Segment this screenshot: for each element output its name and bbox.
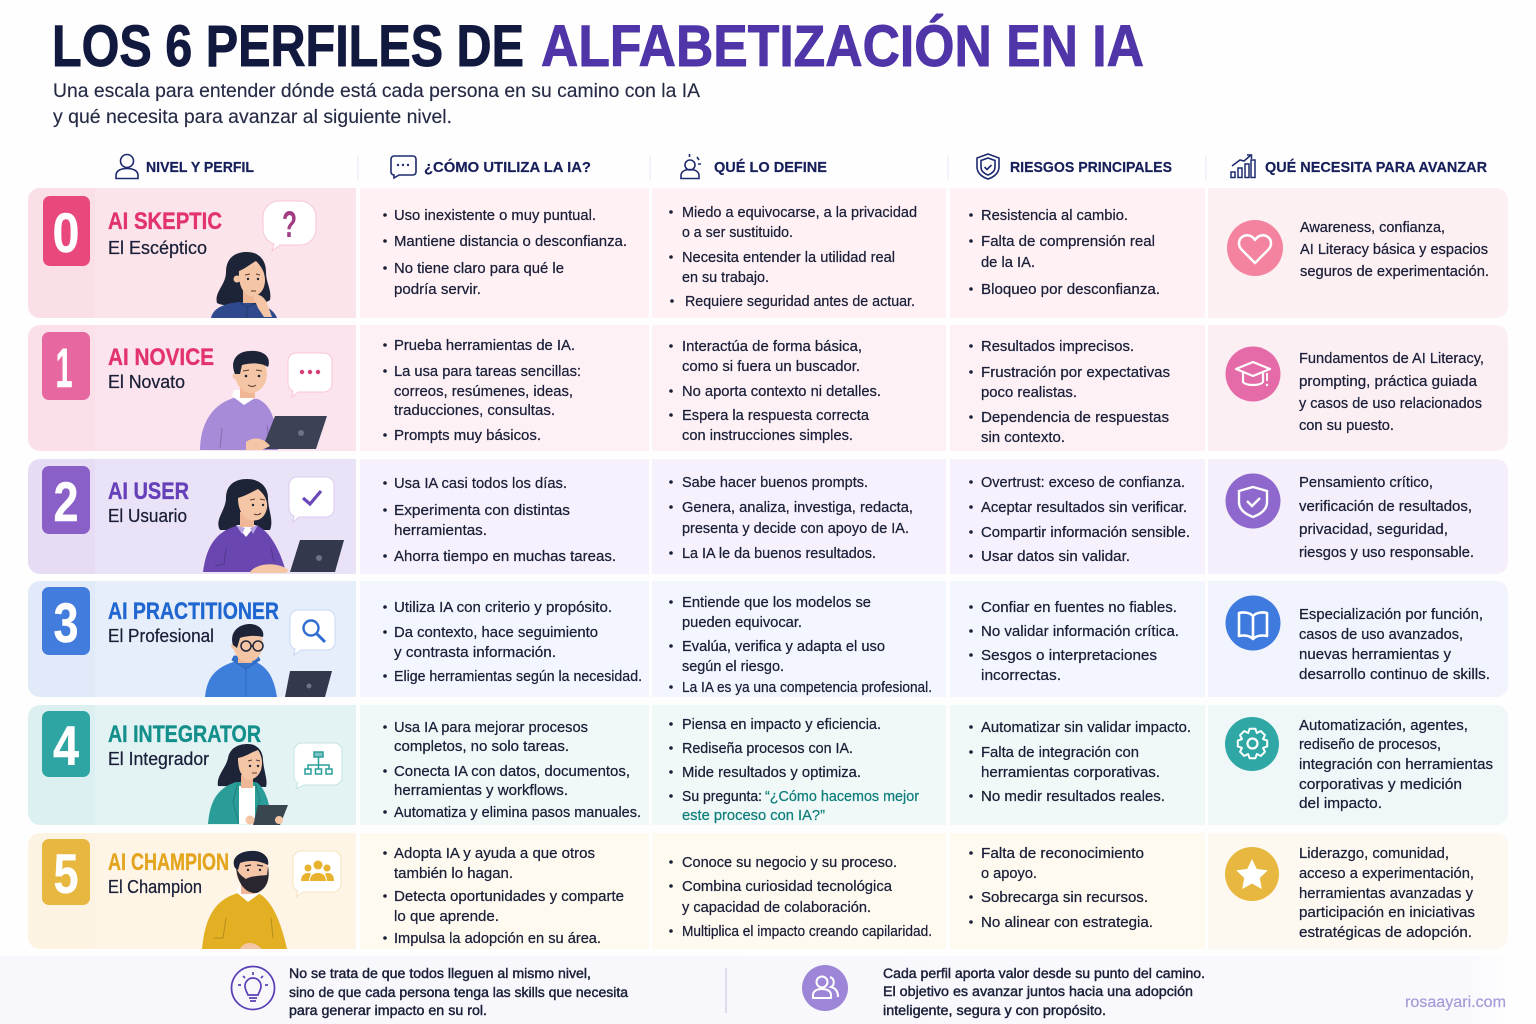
panel: que necesita 2: Pensamiento crítico, [1299, 475, 1433, 491]
panel: que lo define 1: con instrucciones simples. [682, 428, 853, 444]
panel: como utiliza 4: Conecta IA con datos, documentos, [394, 764, 630, 780]
panel: que necesita 0 [1208, 188, 1508, 318]
panel: que necesita 1 [1208, 325, 1508, 451]
callout: message right: inteligente, segura y con propósito. [883, 1003, 1106, 1018]
panel: que necesita 3: nuevas herramientas y [1299, 647, 1452, 663]
panel: perfil 3: AI PRACTITIONER [108, 598, 279, 625]
panel: riesgos 2: Compartir información sensible. [981, 525, 1190, 541]
header: que lo define [681, 154, 827, 178]
panel: que necesita 0: Awareness, confianza, [1300, 220, 1445, 236]
panel: que necesita 0: seguros de experimentación. [1300, 264, 1489, 280]
panel: que necesita 2: privacidad, seguridad, [1299, 522, 1448, 538]
panel: riesgos 5: o apoyo. [981, 866, 1037, 882]
panel: como utiliza 2: Ahorra tiempo en muchas tareas. [394, 549, 616, 565]
subtitle: y qué necesita para avanzar al siguiente nivel. [53, 106, 452, 128]
callout: message left [289, 966, 629, 1018]
panel: que lo define 4: Piensa en impacto y eficiencia. [682, 717, 881, 733]
panel: como utiliza 4: Usa IA para mejorar procesos [394, 720, 588, 736]
brand: rosaayari.com [1405, 994, 1506, 1011]
panel: perfil 3: El Profesional [108, 626, 214, 646]
footer [0, 956, 1510, 1024]
panel: riesgos 0: Falta de comprensión real [981, 234, 1155, 250]
panel: que necesita 4: corporativas y medición [1299, 777, 1462, 793]
panel: perfil 3 [28, 581, 356, 697]
illustration: champion bearded man [202, 851, 287, 949]
column headers [116, 154, 1487, 180]
row 3: AI Practitioner [28, 581, 1508, 697]
panel: que lo define 3: Evalúa, verifica y adapta el uso [682, 639, 885, 655]
panel: que necesita 3 [1208, 581, 1508, 697]
panel: que lo define 4: “¿Cómo hacemos mejor [765, 789, 919, 805]
callout: message right [883, 966, 1205, 1018]
header: que necesita [1231, 155, 1487, 178]
title: ALFABETIZACIÓN EN IA [541, 13, 1144, 79]
panel: que necesita 4: del impacto. [1299, 796, 1382, 812]
panel: riesgos 2: Overtrust: exceso de confianza. [981, 475, 1185, 491]
panel: que lo define 0: Necesita entender la utilidad real [682, 250, 895, 266]
panel: como utiliza 2: herramientas. [394, 523, 487, 539]
panel: como utiliza 3 [360, 581, 649, 697]
icon: star [1225, 847, 1279, 901]
panel: que necesita 3: desarrollo continuo de skills. [1299, 667, 1490, 683]
icon: people [802, 965, 848, 1011]
panel: que lo define 4 [652, 705, 946, 825]
panel: perfil 5 [28, 833, 356, 949]
panel: como utiliza 1: correos, resúmenes, ideas, [394, 384, 573, 400]
panel: que lo define 3: según el riesgo. [682, 659, 784, 675]
panel: que lo define 5: Multiplica el impacto creando capilaridad. [682, 924, 932, 940]
icon: speech bubble magnifier [290, 610, 335, 655]
panel: que lo define 1: como si fuera un buscador. [682, 359, 860, 375]
panel: que necesita 5: acceso a experimentación, [1299, 866, 1474, 882]
panel: como utiliza 3: y contrasta información. [394, 645, 556, 661]
icon: open book [1226, 596, 1280, 650]
panel: que lo define 3: pueden equivocar. [682, 615, 802, 631]
panel: perfil 0 [28, 188, 356, 318]
panel: riesgos 0: Bloqueo por desconfianza. [981, 282, 1160, 298]
panel: riesgos 5 [950, 833, 1205, 949]
panel: que lo define 1: No aporta contexto ni detalles. [682, 384, 881, 400]
panel: perfil 1 [28, 325, 356, 451]
panel: perfil 3: 3 [54, 591, 78, 654]
panel: riesgos 4: herramientas corporativas. [981, 765, 1160, 781]
panel: perfil 4: AI INTEGRATOR [108, 721, 261, 748]
panel: riesgos 1: Dependencia de respuestas [981, 410, 1169, 426]
panel: riesgos 1: sin contexto. [981, 430, 1065, 446]
panel: perfil 2: 2 [54, 470, 78, 533]
callout: message left: sino de que cada persona tenga las skills que necesita [289, 985, 629, 1000]
panel: riesgos 1: poco realistas. [981, 385, 1077, 401]
panel: perfil 1: El Novato [108, 372, 185, 392]
panel: riesgos 4: No medir resultados reales. [981, 789, 1165, 805]
header: nivel y perfil: NIVEL Y PERFIL [146, 159, 254, 176]
icon: speech bubble people [293, 851, 341, 897]
subtitle: Una escala para entender dónde está cada persona en su camino con la IA [53, 80, 700, 102]
panel: que necesita 5: estratégicas de adopción. [1299, 925, 1472, 941]
panel: riesgos 3: Sesgos o interpretaciones [981, 648, 1157, 664]
panel: que necesita 5: participación en iniciativas [1299, 905, 1475, 921]
panel: riesgos 3 [950, 581, 1205, 697]
header: como utiliza: ¿CÓMO UTILIZA LA IA? [424, 158, 591, 176]
panel: que lo define 3: Entiende que los modelos se [682, 595, 871, 611]
icon: shield check [1226, 474, 1280, 528]
panel: perfil 2 [28, 459, 356, 574]
panel: que lo define 4: Rediseña procesos con IA. [682, 741, 853, 757]
icon: heart [1227, 220, 1283, 276]
panel: como utiliza 0 [360, 188, 649, 318]
illustration: skeptic woman [211, 252, 277, 318]
panel: que lo define 4: Mide resultados y optimiza. [682, 765, 861, 781]
panel: perfil 5: AI CHAMPION [108, 849, 229, 876]
panel: como utiliza 4: herramientas y workflows. [394, 783, 568, 799]
panel: riesgos 2: Aceptar resultados sin verificar. [981, 500, 1187, 516]
panel: que necesita 4: Automatización, agentes, [1299, 718, 1468, 734]
panel: perfil 2: AI USER [108, 478, 189, 505]
panel: como utiliza 4: Automatiza y elimina pasos manuales. [394, 805, 641, 821]
panel: que lo define 0 [652, 188, 946, 318]
row 1: AI Novice [28, 325, 1508, 451]
panel: como utiliza 5: también lo hagan. [394, 866, 513, 882]
panel: que necesita 5: herramientas avanzadas y [1299, 886, 1474, 902]
panel: como utiliza 1 [360, 325, 649, 451]
icon: graduation cap [1226, 346, 1280, 402]
callout: message right: Cada perfil aporta valor desde su punto del camino. [883, 966, 1205, 981]
panel: que necesita 3: Especialización por función, [1299, 607, 1483, 623]
panel: como utiliza 0: podría servir. [394, 282, 481, 298]
panel: como utiliza 3: Da contexto, hace seguimiento [394, 625, 598, 641]
panel: perfil 4: El Integrador [108, 749, 209, 769]
panel: como utiliza 5: lo que aprende. [394, 909, 499, 925]
panel: como utiliza 4: completos, no solo tareas. [394, 739, 569, 755]
panel: que lo define 5: Conoce su negocio y su proceso. [682, 855, 897, 871]
panel: como utiliza 2: Experimenta con distintas [394, 503, 570, 519]
panel: perfil 5: 5 [54, 842, 78, 905]
panel: que lo define 1 [652, 325, 946, 451]
panel: como utiliza 5: Impulsa la adopción en su área. [394, 931, 601, 947]
callout: message left: No se trata de que todos lleguen al mismo nivel, [289, 966, 591, 981]
panel: que lo define 1: Interactúa de forma básica, [682, 339, 862, 355]
icon: gear [1225, 717, 1279, 771]
subtitle [53, 80, 700, 128]
header: nivel y perfil [116, 154, 254, 178]
header: como utiliza [391, 156, 591, 178]
panel: perfil 1: 1 [56, 336, 72, 399]
panel: que necesita 1: y casos de uso relacionados [1299, 396, 1482, 412]
panel: que necesita 1: Fundamentos de AI Literacy, [1299, 351, 1484, 367]
panel: que lo define 2 [652, 459, 946, 574]
row 0: AI Skeptic [28, 188, 1508, 318]
panel: riesgos 1: Resultados imprecisos. [981, 339, 1134, 355]
panel: riesgos 5: Sobrecarga sin recursos. [981, 890, 1148, 906]
panel: que lo define 0: Miedo a equivocarse, a la privacidad [682, 205, 917, 221]
panel: que lo define 2: La IA le da buenos resultados. [682, 546, 876, 562]
panel: riesgos 5: No alinear con estrategia. [981, 915, 1153, 931]
row 2: AI User [28, 459, 1508, 574]
panel: que necesita 1: prompting, práctica guiada [1299, 374, 1478, 390]
panel: que necesita 4: rediseño de procesos, [1299, 737, 1441, 753]
panel: perfil 4 [28, 705, 356, 825]
panel: que necesita 1: con su puesto. [1299, 418, 1394, 434]
panel: riesgos 1: Frustración por expectativas [981, 365, 1170, 381]
panel: como utiliza 1: Prompts muy básicos. [394, 428, 541, 444]
row 4: AI Integrator [28, 705, 1508, 825]
panel: como utiliza 1: Prueba herramientas de IA. [394, 338, 575, 354]
panel: riesgos 3: Confiar en fuentes no fiables. [981, 600, 1177, 616]
panel: que lo define 0: en su trabajo. [682, 270, 769, 286]
panel: como utiliza 3: Utiliza IA con criterio y propósito. [394, 600, 612, 616]
panel: que necesita 0: AI Literacy básica y espacios [1300, 242, 1488, 258]
panel: perfil 4: 4 [53, 714, 79, 777]
panel: riesgos 0: Resistencia al cambio. [981, 208, 1128, 224]
icon: speech bubble dots [288, 353, 332, 397]
panel: perfil 1: AI NOVICE [108, 344, 214, 371]
panel: como utiliza 0: Uso inexistente o muy puntual. [394, 208, 596, 224]
panel: que lo define 3: La IA es ya una competencia profesional. [682, 680, 932, 696]
panel: que lo define 0: Requiere seguridad antes de actuar. [685, 294, 915, 310]
panel: que lo define 5 [652, 833, 946, 949]
panel: que lo define 5: y capacidad de colaboración. [682, 900, 871, 916]
illustration: integrator woman with tablet [208, 744, 288, 825]
row 5: AI Champion [28, 833, 1508, 949]
panel: que necesita 4: integración con herramientas [1299, 757, 1493, 773]
panel: riesgos 5: Falta de reconocimiento [981, 846, 1144, 862]
panel: como utiliza 5 [360, 833, 649, 949]
panel: que necesita 2: riesgos y uso responsable. [1299, 545, 1474, 561]
header: que lo define: QUÉ LO DEFINE [714, 159, 827, 176]
illustration: novice man with laptop [200, 351, 327, 450]
panel: como utiliza 0: Mantiene distancia o desconfianza. [394, 234, 627, 250]
illustration: practitioner man with glasses [205, 624, 332, 697]
panel: riesgos 3: No validar información crítica. [981, 624, 1179, 640]
panel: como utiliza 1: La usa para tareas sencillas: [394, 364, 581, 380]
icon: lightbulb [232, 966, 274, 1010]
illustration: user woman with laptop [203, 479, 344, 573]
header: que necesita: QUÉ NECESITA PARA AVANZAR [1265, 159, 1487, 176]
panel: riesgos 1 [950, 325, 1205, 451]
icon: speech bubble question: ? [282, 204, 297, 245]
panel: riesgos 4: Automatizar sin validar impacto. [981, 720, 1191, 736]
panel: que lo define 0: o a ser sustituido. [682, 225, 793, 241]
panel: que lo define 2: Sabe hacer buenos prompts. [682, 475, 868, 491]
title [52, 13, 1144, 79]
panel: perfil 0: AI SKEPTIC [108, 208, 222, 235]
panel: riesgos 2: Usar datos sin validar. [981, 549, 1130, 565]
panel: que lo define 5: Combina curiosidad tecnológica [682, 879, 893, 895]
header: riesgos: RIESGOS PRINCIPALES [1010, 159, 1172, 176]
panel: riesgos 0 [950, 188, 1205, 318]
panel: como utiliza 5: Adopta IA y ayuda a que otros [394, 846, 595, 862]
header: riesgos [977, 154, 1172, 179]
panel: como utiliza 3: Elige herramientas según la necesidad. [394, 669, 642, 685]
panel: que lo define 4: Su pregunta: [682, 789, 762, 805]
panel: riesgos 3: incorrectas. [981, 668, 1061, 684]
panel: como utiliza 2 [360, 459, 649, 574]
title: LOS 6 PERFILES DE [52, 14, 524, 79]
panel: perfil 0: 0 [52, 201, 80, 264]
panel: como utiliza 4 [360, 705, 649, 825]
panel: perfil 0: El Escéptico [108, 238, 207, 258]
callout: message left: para generar impacto en su rol. [289, 1003, 487, 1018]
icon: speech bubble check [289, 477, 334, 522]
panel: que necesita 2 [1208, 459, 1508, 574]
panel: que necesita 3: casos de uso avanzados, [1299, 627, 1463, 643]
panel: perfil 2: El Usuario [108, 506, 187, 526]
panel: que necesita 5: Liderazgo, comunidad, [1299, 846, 1449, 862]
panel: como utiliza 5: Detecta oportunidades y comparte [394, 889, 624, 905]
panel: riesgos 4 [950, 705, 1205, 825]
panel: riesgos 4: Falta de integración con [981, 745, 1139, 761]
panel: que lo define 1: Espera la respuesta correcta [682, 408, 870, 424]
panel: que lo define 3 [652, 581, 946, 697]
panel: que necesita 2: verificación de resultados, [1299, 499, 1472, 515]
icon: speech bubble question [263, 201, 316, 251]
icon: speech bubble org chart [294, 743, 342, 789]
panel: perfil 5: El Champion [108, 877, 202, 897]
panel: riesgos 2 [950, 459, 1205, 574]
panel: que lo define 2: presenta y decide con apoyo de IA. [682, 521, 909, 537]
panel: como utiliza 1: traducciones, consultas. [394, 403, 555, 419]
panel: que lo define 2: Genera, analiza, investiga, redacta, [682, 500, 913, 516]
panel: que necesita 4 [1208, 705, 1508, 825]
panel: riesgos 0: de la IA. [981, 255, 1035, 271]
panel: que necesita 5 [1208, 833, 1508, 949]
panel: como utiliza 2: Usa IA casi todos los días. [394, 476, 567, 492]
callout: message right: El objetivo es avanzar juntos hacia una adopción [883, 984, 1193, 999]
panel: como utiliza 0: No tiene claro para qué le [394, 261, 564, 277]
panel: que lo define 4: este proceso con IA?” [682, 808, 825, 824]
